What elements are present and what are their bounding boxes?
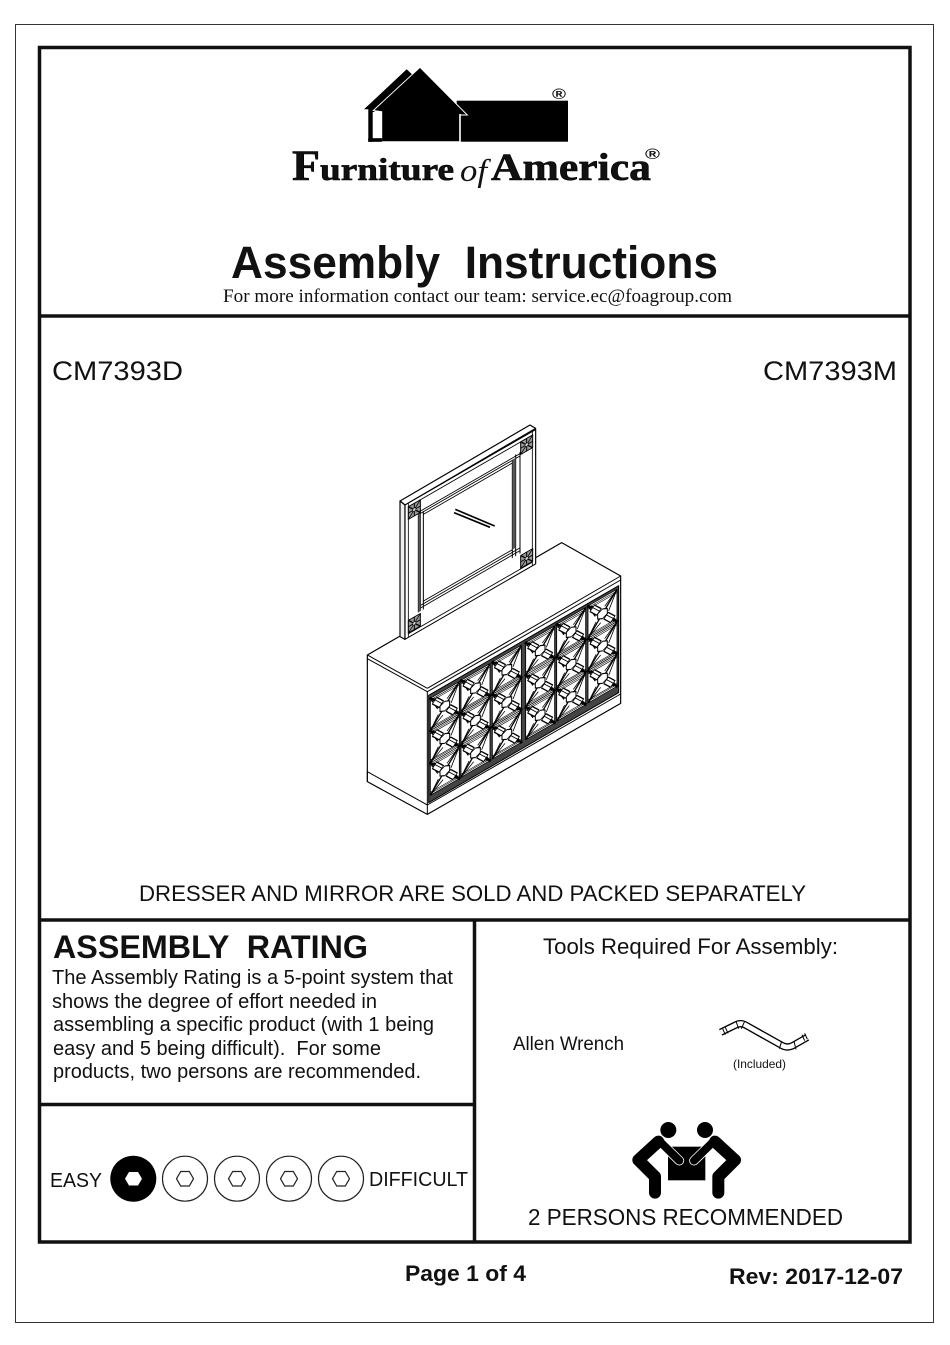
assembly rating description: shows the degree of effort needed in: [52, 991, 377, 1013]
mirror glass reflection: [454, 509, 495, 527]
illustration: dresser and mirror: [367, 425, 621, 814]
rating 5 empty: [318, 1156, 364, 1201]
logo wordmark: ®: [645, 146, 660, 163]
assembly rating description: products, two persons are recommended.: [53, 1061, 421, 1083]
title: Assembly Instructions: [231, 237, 718, 288]
assembly rating description: The Assembly Rating is a 5-point system that: [52, 967, 453, 989]
rating 2 empty: [162, 1156, 208, 1201]
mirror: [400, 425, 536, 639]
icon: allen wrench: [721, 1021, 807, 1049]
assembly rating description: easy and 5 being difficult). For some: [53, 1038, 381, 1060]
assembly rating description: [52, 967, 453, 1083]
logo wordmark: [292, 143, 660, 190]
revision date: Rev: 2017-12-07: [729, 1264, 903, 1289]
logo wordmark: of: [460, 152, 491, 188]
dresser door panels: [429, 586, 619, 803]
logo house icon: [364, 67, 568, 142]
contact line: For more information contact our team: service.ec@foagroup.com: [223, 286, 732, 307]
page number: Page 1 of 4: [405, 1261, 527, 1286]
logo house icon: ®: [552, 86, 566, 103]
logo wordmark: F: [292, 143, 320, 190]
assembly rating heading: ASSEMBLY RATING: [53, 929, 368, 965]
assembly rating description: assembling a specific product (with 1 being: [53, 1014, 434, 1036]
rating 1 filled: [110, 1156, 156, 1202]
label: difficult: DIFFICULT: [369, 1169, 468, 1191]
tools heading: Tools Required For Assembly:: [543, 934, 838, 959]
logo wordmark: urniture: [320, 151, 454, 187]
tool name: allen wrench: Allen Wrench: [513, 1034, 624, 1055]
rating 4 empty: [266, 1156, 312, 1201]
logo: Furniture of America: [292, 67, 660, 190]
rating 3 empty: [214, 1156, 260, 1201]
difficulty scale: [50, 1156, 468, 1202]
label: easy: EASY: [50, 1170, 102, 1192]
note: sold separately: DRESSER AND MIRROR ARE SOLD AND PACKED SEPARATELY: [139, 881, 806, 906]
model number: mirror: CM7393M: [763, 356, 897, 386]
model number: dresser: CM7393D: [52, 356, 183, 386]
logo wordmark: America: [491, 146, 651, 189]
dresser body: [367, 543, 621, 814]
note: two persons recommended: 2 PERSONS RECOMMENDED: [528, 1204, 843, 1230]
tool note: included: (Included): [733, 1057, 786, 1071]
icon: two persons lifting: [638, 1122, 735, 1193]
